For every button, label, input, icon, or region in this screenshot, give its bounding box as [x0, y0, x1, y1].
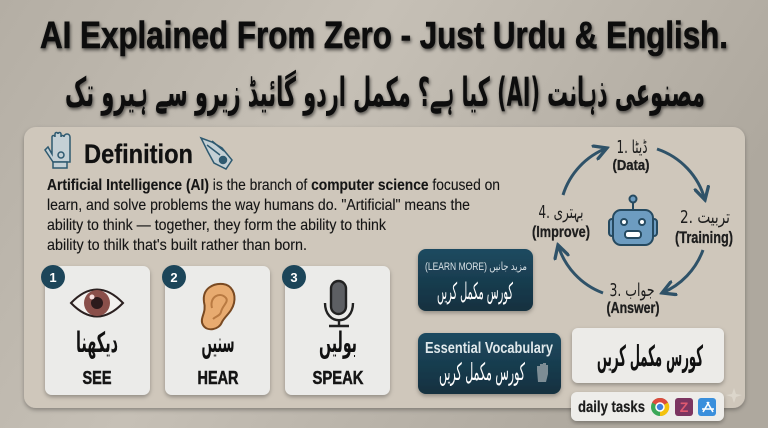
button: essential vocabulary: کورس مکمل کریں: [439, 358, 525, 386]
icon: hand: [537, 363, 548, 382]
step 1: (Data): [612, 157, 650, 174]
heading: Definition: Definition: [84, 139, 193, 169]
definition text: Artificial Intelligence (AI) is the branch of computer science focused on: [47, 177, 500, 194]
button: learn more: (LEARN MORE) مزید جانیں: [425, 261, 527, 273]
icon: chrome: [651, 398, 669, 416]
icon: microphone: [325, 281, 353, 326]
urdu label: بولیں: [319, 326, 357, 359]
arrow: data to training: [657, 149, 705, 200]
definition text: ability to think — together, they form the ability to think: [47, 217, 387, 234]
step 1: ڈیٹا .1: [616, 137, 648, 158]
definition text: learn, and solve problems the way humans do. "Artificial" means the: [47, 197, 470, 214]
step 1: [612, 137, 650, 174]
button: learn more: کورس مکمل کریں: [437, 279, 513, 305]
arrow: training to answer: [662, 250, 703, 293]
card: hear: سنیں: [202, 326, 234, 359]
icon: ear: [202, 284, 235, 329]
arrow: answer to improve: [558, 245, 603, 293]
icon: robot pointing hand: [201, 138, 232, 169]
icon: robotic hand: [45, 132, 70, 168]
step 2: تربیت .2: [680, 207, 730, 228]
step 4: (Improve): [532, 224, 590, 241]
cycle diagram: [532, 137, 733, 317]
urdu label: دیکھنا: [76, 326, 118, 359]
icon: purple app: [675, 398, 693, 416]
step 3: (Answer): [606, 300, 660, 317]
icon: robot: [609, 196, 657, 245]
icon: purple app: Z: [680, 399, 689, 415]
badge: daily tasks: [571, 392, 724, 421]
watermark sparkle: [726, 388, 742, 403]
button: learn more: [418, 249, 533, 311]
badge 2: 2: [170, 270, 178, 285]
button: essential vocabulary: Essential Vocabulary: [425, 340, 553, 357]
label: SEE: [82, 368, 112, 388]
card: complete course: [572, 328, 724, 383]
icon: app store: [698, 398, 716, 416]
panel: main: [24, 127, 745, 408]
icon: eye: [71, 290, 123, 316]
step 2: (Training): [675, 228, 733, 247]
card: see: [41, 265, 150, 395]
label: HEAR: [198, 368, 238, 388]
label: SPEAK: [312, 368, 364, 388]
arrow: improve to data: [563, 148, 607, 195]
badge: daily tasks: daily tasks: [578, 399, 645, 416]
definition text: ability to thilk that's built rather than born.: [47, 237, 307, 254]
step 3: [606, 280, 660, 317]
step 2: [675, 207, 733, 247]
card: hear: [162, 265, 270, 395]
badge 1: 1: [49, 270, 57, 285]
step 4: [532, 202, 590, 241]
card: speak: [282, 265, 390, 395]
definition text: [47, 177, 500, 254]
step 3: جواب .3: [610, 280, 654, 301]
step 4: بہتری .4: [538, 202, 584, 223]
button: essential vocabulary: [418, 333, 561, 394]
badge 3: 3: [290, 270, 298, 285]
